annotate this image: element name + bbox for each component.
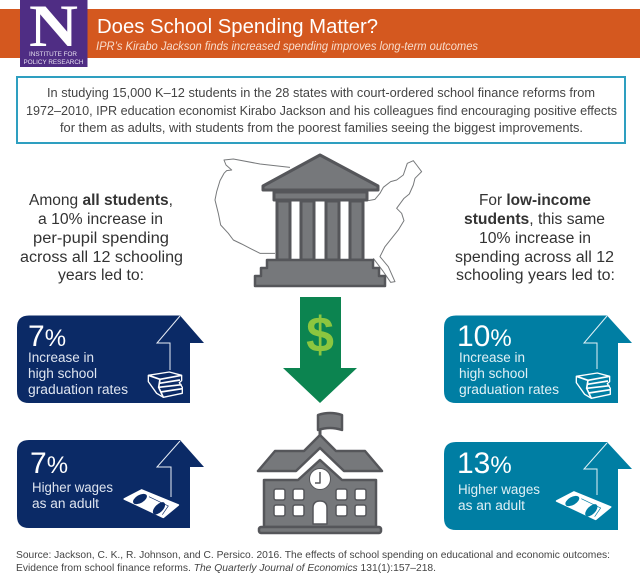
icon: school building [258, 413, 382, 533]
card: all students graduation: graduation rates [28, 382, 128, 397]
card: all students graduation: high school [28, 366, 97, 381]
card: low-income graduation [444, 316, 632, 403]
card: low-income graduation: 10% [457, 320, 512, 353]
intro text box: for them as adults, with students from the poorest families seeing the biggest improvements. [60, 120, 583, 135]
map of the United States [215, 159, 422, 282]
arrow: money flowing down [283, 297, 357, 403]
logo: Institute for Policy Research [20, 0, 88, 67]
right intro text: students, this same [464, 211, 605, 228]
icon: money [124, 490, 178, 517]
icon: books [576, 373, 610, 398]
right intro text: spending across all 12 [455, 249, 614, 266]
intro text box [17, 77, 625, 143]
card: low-income wages: 13% [457, 447, 512, 480]
card: all students wages: as an adult [32, 496, 99, 511]
source citation: Source: Jackson, C. K., R. Johnson, and C. Persico. 2016. The effects of school spending on educational and economic outcomes: [16, 549, 610, 561]
card: low-income wages: as an adult [458, 498, 525, 513]
right intro text: For low-income [479, 192, 591, 209]
subtitle: IPR’s Kirabo Jackson finds increased spending improves long-term outcomes [96, 41, 478, 53]
left intro text: across all 12 schooling [20, 249, 183, 266]
icon: dollar sign: $ [306, 307, 334, 363]
card: all students wages: 7% [30, 447, 68, 480]
icon: books [148, 372, 182, 397]
source citation [16, 549, 610, 574]
right intro text: schooling years led to: [456, 267, 615, 284]
logo: Institute for Policy Research: INSTITUTE FOR [29, 52, 78, 58]
card: low-income wages: Higher wages [458, 482, 540, 497]
icon: money [557, 492, 611, 519]
source citation: Evidence from school finance reforms. The Quarterly Journal of Economics 131(1):157–218. [16, 562, 436, 574]
card: low-income graduation: graduation rates [459, 382, 559, 397]
left intro text [20, 192, 183, 284]
card: all students graduation: Increase in [28, 350, 94, 365]
card: low-income graduation: high school [459, 366, 528, 381]
card: low-income wages [444, 442, 632, 530]
intro text box: In studying 15,000 K–12 students in the 28 states with court-ordered school finance reforms from [47, 85, 595, 100]
icon: courthouse [255, 155, 385, 286]
logo: Institute for Policy Research: POLICY RESEARCH [24, 60, 84, 66]
intro text box: 1972–2010, IPR education economist Kirabo Jackson and his colleagues find encouraging positive effects [26, 103, 617, 118]
left intro text: years led to: [58, 267, 144, 284]
left intro text: a 10% increase in [38, 211, 163, 228]
card: low-income graduation: Increase in [459, 350, 525, 365]
right intro text: 10% increase in [479, 230, 591, 247]
card: all students graduation [17, 316, 204, 403]
left intro text: Among all students, [29, 192, 173, 209]
left intro text: per-pupil spending [33, 230, 169, 247]
right intro text [455, 192, 615, 284]
header band [0, 9, 640, 58]
card: all students wages [17, 440, 204, 528]
title: Does School Spending Matter? [97, 16, 378, 38]
card: all students graduation: 7% [28, 320, 66, 353]
card: all students wages: Higher wages [32, 480, 113, 495]
